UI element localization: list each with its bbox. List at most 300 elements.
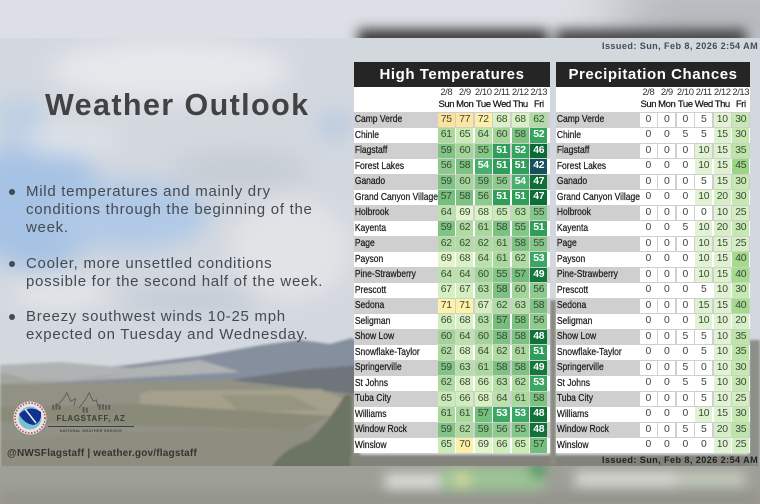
- column headers: Fri: [736, 99, 746, 110]
- temperature rows: 58: [496, 222, 507, 233]
- temperature rows: Forest Lakes: [355, 160, 404, 172]
- precipitation rows: Sedona: [557, 300, 586, 311]
- bullet 2: possible for the second half of the week.: [26, 273, 323, 290]
- precipitation rows: 0: [664, 315, 669, 326]
- precipitation rows: 5: [701, 392, 706, 404]
- temperature rows: 71: [459, 300, 470, 310]
- precipitation rows: 20: [717, 424, 728, 434]
- precipitation rows: 0: [664, 377, 669, 388]
- temperature rows: Payson: [355, 254, 383, 264]
- temperature rows: 55: [533, 206, 544, 218]
- temperature rows: [354, 112, 550, 453]
- temperature rows: 47: [533, 176, 544, 186]
- temperature rows: 48: [533, 424, 544, 434]
- precipitation rows: Flagstaff: [557, 145, 589, 156]
- temperature rows: Williams: [355, 408, 387, 420]
- temperature rows: 54: [478, 160, 489, 171]
- temperature rows: 67: [441, 284, 452, 295]
- temperature rows: 65: [496, 206, 507, 218]
- precipitation rows: St Johns: [557, 378, 590, 388]
- precipitation rows: 0: [664, 300, 669, 310]
- column headers: 2/8: [642, 87, 654, 98]
- temperature rows: 68: [459, 315, 470, 326]
- temperature rows: 53: [515, 408, 526, 419]
- temperature rows: 62: [533, 114, 544, 124]
- temperature rows: 66: [441, 315, 452, 326]
- precipitation rows: 30: [735, 129, 746, 140]
- precipitation rows: 0: [682, 300, 688, 310]
- temperature rows: 59: [441, 176, 452, 186]
- precipitation rows: 0: [682, 439, 688, 450]
- precipitation rows: 10: [698, 191, 709, 202]
- temperature rows: 63: [515, 300, 526, 310]
- precipitation rows: Snowflake-Taylor: [557, 346, 622, 358]
- column headers: 2/13: [530, 87, 547, 98]
- bullet 3: [9, 308, 308, 343]
- heading: precipitation chances: Precipitation Chances: [568, 66, 738, 83]
- precipitation rows: 15: [717, 176, 728, 186]
- precipitation rows: 15: [717, 300, 728, 310]
- precipitation rows: 35: [735, 346, 746, 357]
- temperature rows: 61: [441, 408, 452, 419]
- precipitation rows: 0: [682, 114, 688, 124]
- precipitation rows: 0: [664, 392, 669, 404]
- temperature rows: Camp Verde: [355, 114, 402, 125]
- precipitation rows: Window Rock: [557, 424, 609, 435]
- temperature rows: 68: [515, 114, 526, 124]
- column headers: Wed: [493, 99, 511, 110]
- icon: NWS logo: [14, 402, 46, 434]
- temperature rows: 56: [478, 191, 489, 202]
- column headers: 2/10: [475, 87, 492, 98]
- precipitation rows: Springerville: [557, 362, 604, 373]
- precipitation rows: 0: [682, 144, 688, 156]
- bullet list: [9, 183, 323, 343]
- precipitation rows: 0: [646, 408, 651, 419]
- temperature rows: 68: [478, 206, 489, 218]
- temperature rows: 59: [478, 176, 489, 186]
- precipitation rows: 0: [646, 253, 651, 264]
- title: Weather Outlook: [45, 88, 309, 122]
- precipitation rows: 0: [646, 330, 651, 342]
- precipitation rows: Kayenta: [557, 222, 588, 234]
- temperature rows: Prescott: [355, 284, 386, 296]
- panel: precipitation chances: [556, 62, 750, 453]
- bullet 3: Breezy southwest winds 10-25 mph: [26, 308, 286, 325]
- temperature rows: 51: [533, 222, 544, 233]
- precipitation rows: 0: [646, 362, 651, 372]
- precipitation rows: 10: [698, 408, 709, 419]
- column headers: Thu: [513, 99, 528, 110]
- temperature rows: 62: [515, 377, 526, 388]
- temperature rows: 58: [459, 191, 470, 202]
- precipitation rows: 0: [646, 160, 651, 171]
- precipitation rows: 30: [735, 176, 746, 186]
- precipitation rows: 30: [735, 377, 746, 388]
- precipitation rows: 0: [701, 362, 706, 372]
- precipitation rows: 0: [664, 284, 669, 295]
- logo text: FLAGSTAFF, AZ: [56, 414, 126, 423]
- precipitation rows: 0: [664, 191, 669, 202]
- icon: Flagstaff mountains logo: [52, 392, 110, 413]
- footer handle and website: @NWSFlagstaff | weather.gov/flagstaff: [7, 448, 197, 459]
- temperature rows: 57: [441, 191, 452, 202]
- temperature rows: 51: [496, 144, 507, 156]
- temperature rows: 58: [459, 160, 470, 171]
- temperature rows: 58: [515, 129, 526, 140]
- temperature rows: 55: [533, 238, 544, 248]
- precipitation rows: 0: [682, 315, 688, 326]
- bullet 2: Cooler, more unsettled conditions: [26, 255, 272, 272]
- precipitation rows: 0: [664, 129, 669, 140]
- column headers: Thu: [715, 99, 730, 110]
- temperature rows: Kayenta: [355, 222, 386, 234]
- precipitation rows: 0: [646, 377, 651, 388]
- precipitation rows: 15: [698, 300, 709, 310]
- temperature rows: 58: [533, 392, 544, 404]
- precipitation rows: Grand Canyon Village: [557, 192, 640, 202]
- issued timestamp bottom: Issued: Sun, Feb 8, 2026 2:54 AM: [602, 455, 758, 465]
- temperature rows: 62: [515, 253, 526, 264]
- temperature rows: 57: [515, 268, 526, 280]
- precipitation rows: 10: [698, 268, 709, 280]
- column headers: 2/10: [677, 87, 694, 98]
- heading: precipitation chances: [556, 62, 750, 87]
- precipitation rows: 0: [646, 284, 651, 295]
- temperature rows: 48: [533, 330, 544, 342]
- temperature rows: 64: [478, 253, 489, 264]
- temperature rows: 62: [441, 377, 452, 388]
- bullet 1: [9, 183, 313, 236]
- column headers: 2/12: [714, 87, 731, 98]
- temperature rows: Chinle: [355, 130, 379, 140]
- precipitation rows: Camp Verde: [557, 114, 604, 125]
- temperature rows: Seligman: [355, 316, 390, 326]
- temperature rows: 63: [478, 315, 489, 326]
- precipitation rows: 30: [735, 362, 746, 372]
- temperature rows: 56: [533, 315, 544, 326]
- column headers: Tue: [678, 99, 693, 110]
- precipitation rows: 10: [717, 330, 728, 342]
- precipitation rows: 5: [701, 424, 706, 434]
- precipitation rows: 10: [717, 392, 728, 404]
- precipitation rows: 0: [701, 439, 706, 450]
- precipitation rows: 10: [717, 439, 728, 450]
- temperature rows: 72: [478, 114, 489, 124]
- temperature rows: Pine-Strawberry: [355, 269, 416, 280]
- column headers: 2/13: [732, 87, 749, 98]
- precipitation rows: 0: [664, 160, 669, 171]
- precipitation rows: 10: [717, 346, 728, 357]
- temperature rows: 62: [496, 346, 507, 357]
- precipitation rows: 0: [646, 268, 651, 280]
- precipitation rows: Winslow: [557, 440, 589, 450]
- temperature rows: 57: [533, 439, 544, 450]
- precipitation rows: 5: [701, 346, 706, 357]
- precipitation rows: 0: [664, 253, 669, 264]
- precipitation rows: 10: [698, 238, 709, 248]
- precipitation rows: 0: [664, 222, 669, 233]
- temperature rows: 46: [533, 144, 544, 156]
- temperature rows: 62: [441, 238, 452, 248]
- temperature rows: 51: [515, 191, 526, 202]
- temperature rows: 55: [496, 268, 507, 280]
- temperature rows: 62: [496, 300, 507, 310]
- precipitation rows: 0: [646, 206, 651, 218]
- precipitation rows: 10: [698, 160, 709, 171]
- precipitation rows: 0: [664, 206, 669, 218]
- precipitation rows: 0: [646, 315, 651, 326]
- precipitation rows: 0: [682, 253, 688, 264]
- temperature rows: Show Low: [355, 331, 394, 342]
- precipitation rows: 30: [735, 284, 746, 295]
- precipitation rows: 0: [646, 129, 651, 140]
- precipitation rows: 5: [682, 377, 688, 388]
- temperature rows: 58: [533, 300, 544, 310]
- temperature rows: 52: [533, 129, 544, 140]
- precipitation rows: 20: [717, 191, 728, 202]
- precipitation rows: 0: [664, 408, 669, 419]
- precipitation rows: 0: [682, 238, 688, 248]
- precipitation rows: 0: [664, 176, 669, 186]
- temperature rows: 65: [515, 439, 526, 450]
- temperature rows: 62: [459, 238, 470, 248]
- temperature rows: 55: [515, 222, 526, 233]
- precipitation rows: 45: [735, 160, 746, 171]
- temperature rows: 48: [533, 408, 544, 419]
- precipitation rows: [556, 112, 750, 453]
- precipitation rows: 25: [735, 392, 746, 404]
- temperature rows: 63: [459, 362, 470, 372]
- temperature rows: 54: [515, 176, 526, 186]
- precipitation rows: 0: [646, 176, 651, 186]
- precipitation rows: Forest Lakes: [557, 160, 606, 172]
- precipitation rows: 15: [717, 129, 728, 140]
- precipitation rows: 10: [717, 315, 728, 326]
- temperature rows: Snowflake-Taylor: [355, 346, 420, 358]
- panel: high temperatures: [354, 62, 550, 453]
- temperature rows: 77: [459, 114, 470, 124]
- temperature rows: 69: [459, 206, 470, 218]
- temperature rows: Grand Canyon Village: [355, 192, 438, 202]
- precipitation rows: Show Low: [557, 331, 596, 342]
- column headers: 2/11: [696, 87, 712, 98]
- temperature rows: 59: [441, 222, 452, 233]
- column headers: Sun: [640, 99, 656, 110]
- bullet 1: conditions through the beginning of the: [26, 201, 313, 218]
- temperature rows: 75: [441, 114, 452, 124]
- temperature rows: 56: [496, 424, 507, 434]
- precipitation rows: 10: [698, 222, 709, 233]
- temperature rows: 56: [496, 176, 507, 186]
- precipitation rows: 10: [717, 377, 728, 388]
- precipitation rows: 0: [682, 176, 688, 186]
- temperature rows: 68: [459, 346, 470, 357]
- column headers: 2/11: [494, 87, 510, 98]
- temperature rows: 49: [533, 268, 544, 280]
- temperature rows: 70: [459, 439, 470, 450]
- column headers: 2/9: [661, 87, 673, 98]
- temperature rows: 68: [459, 253, 470, 264]
- precipitation rows: 35: [735, 330, 746, 342]
- temperature rows: 60: [459, 176, 470, 186]
- temperature rows: 62: [459, 222, 470, 233]
- temperature rows: 71: [441, 300, 452, 310]
- precipitation rows: 15: [717, 238, 728, 248]
- temperature rows: 58: [496, 362, 507, 372]
- temperature rows: 62: [441, 346, 452, 357]
- precipitation rows: 5: [701, 129, 706, 140]
- column headers: [354, 87, 550, 112]
- temperature rows: 62: [459, 424, 470, 434]
- temperature rows: Ganado: [355, 176, 385, 187]
- precipitation rows: 0: [646, 238, 651, 248]
- temperature rows: 47: [533, 191, 544, 202]
- precipitation rows: Holbrook: [557, 207, 591, 218]
- temperature rows: 60: [478, 268, 489, 280]
- precipitation rows: 5: [682, 362, 688, 372]
- precipitation rows: 35: [735, 144, 746, 156]
- temperature rows: 65: [459, 129, 470, 140]
- precipitation rows: 10: [698, 315, 709, 326]
- temperature rows: 66: [478, 377, 489, 388]
- precipitation rows: 0: [646, 300, 651, 310]
- precipitation rows: 25: [735, 439, 746, 450]
- temperature rows: Sedona: [355, 300, 384, 311]
- temperature rows: 64: [459, 268, 470, 280]
- precipitation rows: Williams: [557, 408, 589, 420]
- precipitation rows: 0: [682, 268, 688, 280]
- temperature rows: 65: [441, 392, 452, 404]
- precipitation rows: 20: [735, 315, 746, 326]
- precipitation rows: 0: [664, 362, 669, 372]
- precipitation rows: 0: [646, 346, 651, 357]
- logo text: [48, 414, 134, 433]
- precipitation rows: 15: [717, 160, 728, 171]
- temperature rows: Tuba City: [355, 393, 391, 404]
- temperature rows: 51: [496, 160, 507, 171]
- temperature rows: St Johns: [355, 378, 388, 388]
- precipitation rows: 30: [735, 222, 746, 233]
- temperature rows: 64: [496, 392, 507, 404]
- precipitation rows: 15: [717, 253, 728, 264]
- precipitation rows: 0: [646, 191, 651, 202]
- precipitation rows: 0: [664, 346, 669, 357]
- precipitation rows: 5: [701, 176, 706, 186]
- temperature rows: 61: [515, 392, 526, 404]
- bullet 1: Mild temperatures and mainly dry: [26, 183, 271, 200]
- precipitation rows: 0: [682, 408, 688, 419]
- temperature rows: 66: [459, 392, 470, 404]
- precipitation rows: 5: [682, 330, 688, 342]
- temperature rows: 61: [515, 346, 526, 357]
- precipitation rows: Tuba City: [557, 393, 593, 404]
- precipitation rows: 0: [682, 191, 688, 202]
- precipitation rows: 0: [682, 160, 688, 171]
- temperature rows: 56: [533, 284, 544, 295]
- temperature rows: 53: [533, 377, 544, 388]
- temperature rows: 55: [478, 144, 489, 156]
- column headers: 2/9: [459, 87, 471, 98]
- temperature rows: 58: [496, 284, 507, 295]
- temperature rows: 68: [459, 377, 470, 388]
- precipitation rows: 10: [717, 362, 728, 372]
- temperature rows: 60: [515, 284, 526, 295]
- precipitation rows: 10: [698, 253, 709, 264]
- precipitation rows: 5: [701, 330, 706, 342]
- temperature rows: 64: [441, 268, 452, 280]
- temperature rows: 65: [441, 439, 452, 450]
- temperature rows: 64: [478, 129, 489, 140]
- temperature rows: 60: [459, 144, 470, 156]
- precipitation rows: 0: [646, 424, 651, 434]
- precipitation rows: 0: [682, 346, 688, 357]
- precipitation rows: 0: [664, 144, 669, 156]
- precipitation rows: 0: [664, 268, 669, 280]
- heading: high temperatures: High Temperatures: [380, 66, 524, 83]
- temperature rows: 64: [478, 346, 489, 357]
- temperature rows: 53: [496, 408, 507, 419]
- temperature rows: 51: [515, 160, 526, 171]
- temperature rows: 53: [533, 253, 544, 264]
- temperature rows: 56: [441, 160, 452, 171]
- precipitation rows: 15: [717, 144, 728, 156]
- temperature rows: 69: [441, 253, 452, 264]
- precipitation rows: 10: [717, 284, 728, 295]
- column headers: Mon: [456, 99, 473, 110]
- precipitation rows: 40: [735, 268, 746, 280]
- temperature rows: Springerville: [355, 362, 402, 373]
- temperature rows: 64: [459, 330, 470, 342]
- precipitation rows: 30: [735, 191, 746, 202]
- temperature rows: 55: [515, 424, 526, 434]
- temperature rows: 61: [459, 408, 470, 419]
- temperature rows: Window Rock: [355, 424, 407, 435]
- column headers: 2/8: [440, 87, 452, 98]
- precipitation rows: Payson: [557, 254, 585, 264]
- temperature rows: 62: [478, 238, 489, 248]
- temperature rows: 58: [515, 238, 526, 248]
- temperature rows: 58: [515, 362, 526, 372]
- precipitation rows: 0: [646, 144, 651, 156]
- temperature rows: 59: [441, 144, 452, 156]
- temperature rows: 42: [533, 160, 544, 171]
- precipitation rows: 0: [664, 330, 669, 342]
- precipitation rows: 0: [664, 439, 669, 450]
- bullet 1: week.: [26, 219, 69, 236]
- precipitation rows: 0: [646, 392, 651, 404]
- precipitation rows: 0: [682, 284, 688, 295]
- precipitation rows: 0: [664, 238, 669, 248]
- precipitation rows: 15: [717, 268, 728, 280]
- precipitation rows: 10: [717, 114, 728, 124]
- temperature rows: 59: [478, 424, 489, 434]
- temperature rows: 61: [441, 129, 452, 140]
- temperature rows: 60: [441, 330, 452, 342]
- temperature rows: 60: [478, 330, 489, 342]
- temperature rows: 61: [478, 362, 489, 372]
- precipitation rows: 0: [664, 114, 669, 124]
- logo text: NATIONAL WEATHER SERVICE: [60, 429, 122, 433]
- precipitation rows: 0: [664, 424, 669, 434]
- temperature rows: 51: [496, 191, 507, 202]
- temperature rows: 61: [478, 222, 489, 233]
- precipitation rows: 5: [682, 222, 688, 233]
- temperature rows: Page: [355, 238, 375, 249]
- column headers: Wed: [695, 99, 713, 110]
- column headers: [556, 87, 750, 112]
- precipitation rows: 5: [701, 377, 706, 388]
